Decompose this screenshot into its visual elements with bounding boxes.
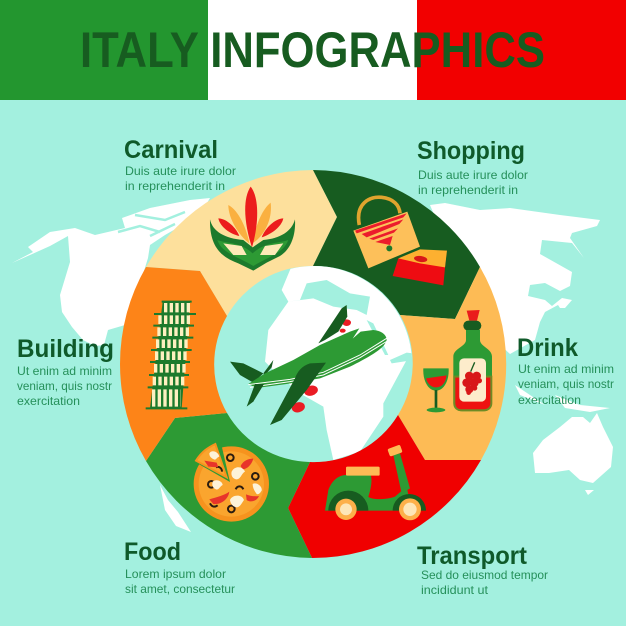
header flag [0, 0, 626, 100]
icon: scooter [325, 445, 426, 520]
segment: shopping [313, 170, 480, 319]
text block: shopping: Duis aute irure dolor [418, 168, 528, 182]
text block: building: exercitation [17, 394, 80, 408]
text block: drink: Drink [517, 334, 578, 362]
icon: wine bottle and glass [423, 310, 492, 412]
segment: transport [288, 415, 481, 558]
text block: shopping: Shopping [417, 137, 525, 165]
text block: transport [417, 542, 548, 597]
segment: food [146, 413, 312, 558]
text block: food: Food [124, 538, 181, 566]
text block: building: veniam, quis nostr [17, 379, 112, 393]
segment: building [120, 267, 227, 461]
icon: carnival mask [210, 187, 295, 271]
text block: food: sit amet, consectetur [125, 582, 235, 596]
arctic sea gaps in map [118, 212, 185, 236]
text block: carnival [124, 136, 236, 193]
segment: drink [398, 267, 506, 460]
segment: carnival [146, 170, 337, 316]
text block: transport: incididunt ut [421, 583, 489, 597]
text block: food [124, 538, 235, 596]
icon: handbag and purse [353, 197, 447, 285]
text block: carnival: Carnival [124, 136, 218, 164]
icon: leaning tower [146, 302, 196, 408]
text block: drink: Ut enim ad minim [518, 362, 614, 376]
world map background [12, 198, 613, 532]
text block: shopping: in reprehenderit in [418, 183, 518, 197]
text block: building: Ut enim ad minim [17, 364, 112, 378]
icon: pizza [192, 440, 269, 522]
icon: airplane [230, 305, 387, 425]
text block: drink [517, 334, 614, 407]
text block: carnival: Duis aute irure dolor [125, 164, 236, 178]
central globe [265, 266, 412, 462]
wine glass [423, 368, 449, 412]
text block: drink: veniam, quis nostr [518, 377, 614, 391]
text block: shopping [417, 137, 528, 197]
text block: food: Lorem ipsum dolor [125, 567, 226, 581]
text block: carnival: in reprehenderit in [125, 179, 225, 193]
text block: building [17, 335, 114, 408]
ring diagram [120, 170, 506, 558]
text block: transport: Transport [417, 542, 528, 570]
text block: transport: Sed do eiusmod tempor [421, 568, 548, 582]
text block: drink: exercitation [518, 393, 581, 407]
title: ITALY INFOGRAPHICS [80, 22, 545, 78]
text block: building: Building [17, 335, 114, 363]
bottle [453, 310, 492, 411]
